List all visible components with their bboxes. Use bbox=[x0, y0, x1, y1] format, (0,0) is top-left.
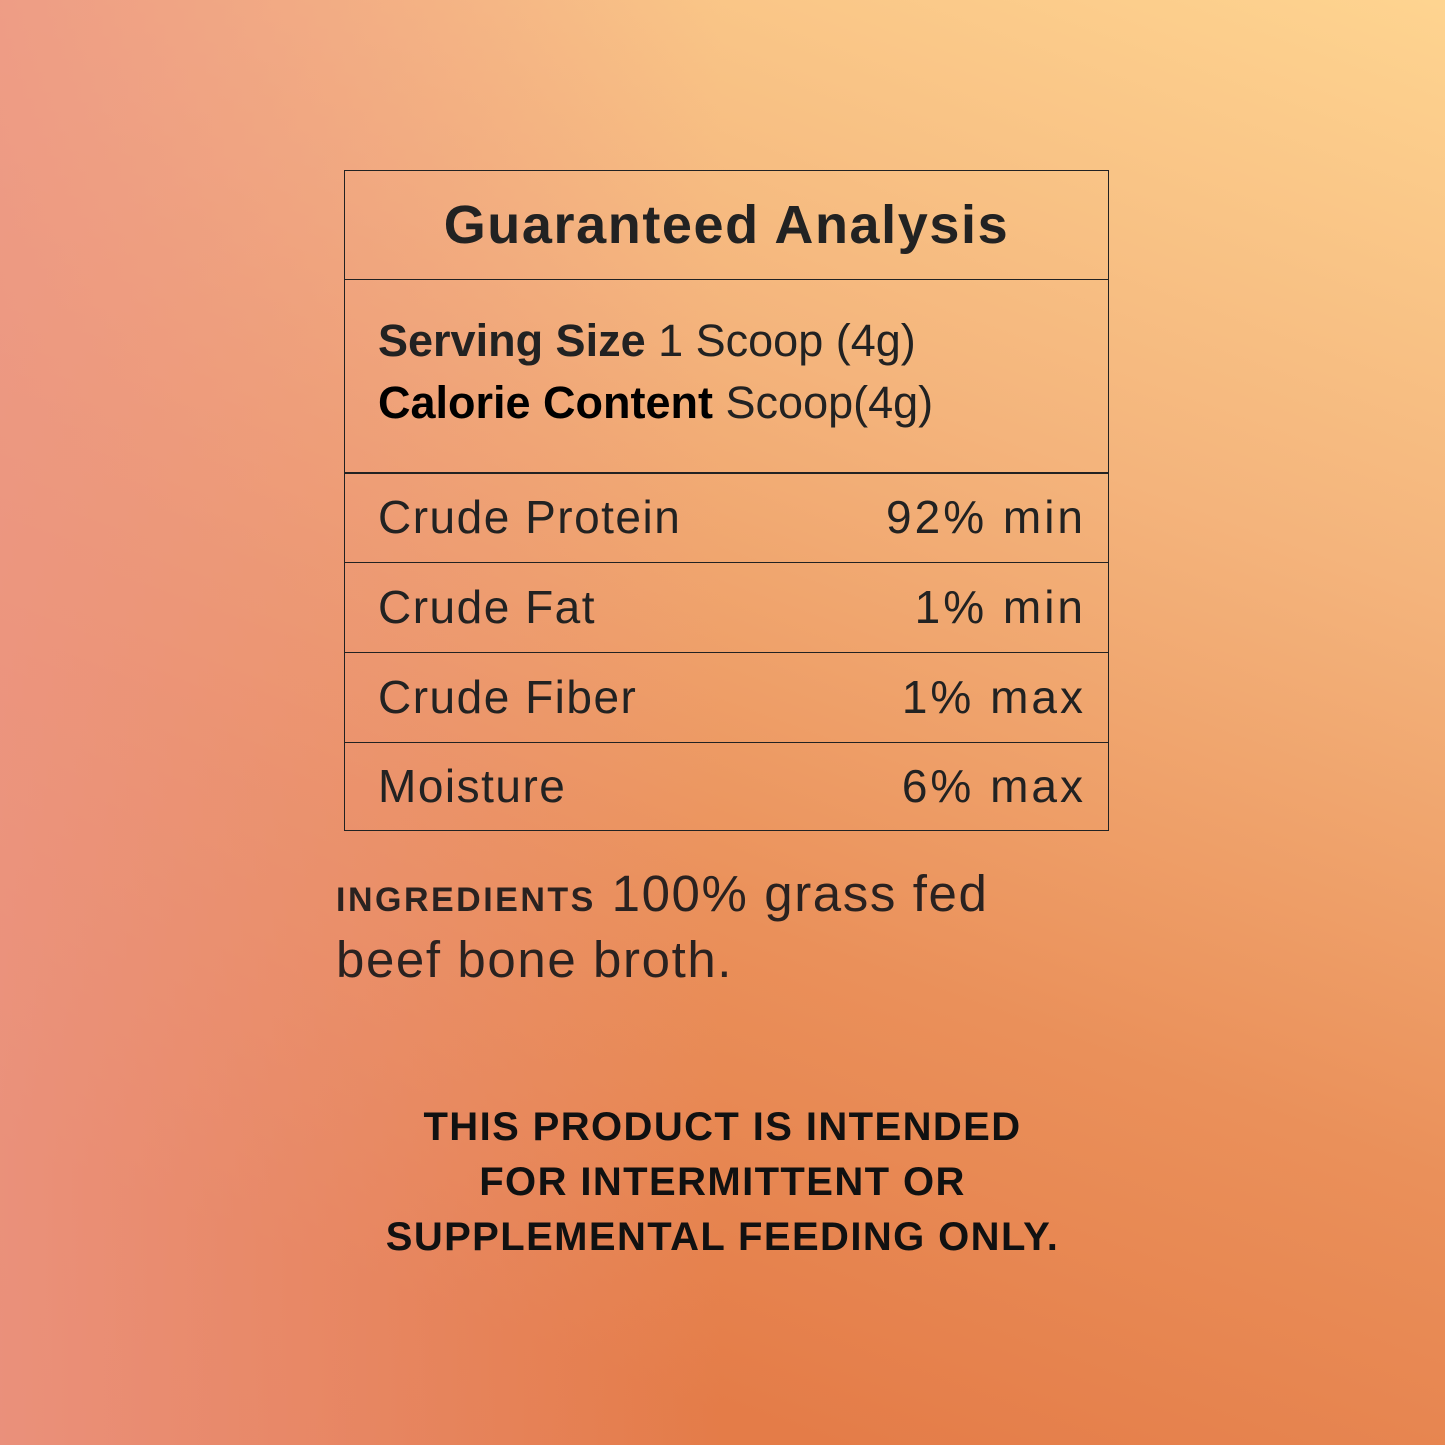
row: moisture: Moisture bbox=[378, 760, 566, 812]
text block: serving info bbox=[345, 279, 1108, 474]
row: moisture bbox=[378, 760, 1086, 812]
panel: guaranteed analysis table bbox=[344, 170, 1109, 831]
text block: serving info: Calorie Content Scoop(4g) bbox=[378, 377, 933, 428]
text block: serving info: Serving Size 1 Scoop (4g) bbox=[378, 315, 916, 366]
row: moisture: 6% max bbox=[902, 760, 1086, 812]
heading: Guaranteed Analysis: Guaranteed Analysis bbox=[444, 195, 1009, 255]
text block: ingredients bbox=[336, 865, 988, 988]
row: crude fat bbox=[345, 563, 1108, 653]
text block: ingredients: INGREDIENTS 100% grass fed bbox=[336, 865, 988, 922]
row: crude fiber: Crude Fiber bbox=[378, 671, 637, 723]
row: crude fat: 1% min bbox=[915, 581, 1086, 633]
text block: disclaimer: SUPPLEMENTAL FEEDING ONLY. bbox=[386, 1215, 1059, 1259]
row: crude protein: Crude Protein bbox=[378, 491, 681, 543]
row: crude protein: 92% min bbox=[886, 491, 1086, 543]
text block: disclaimer: THIS PRODUCT IS INTENDED bbox=[423, 1105, 1022, 1149]
text block: disclaimer bbox=[386, 1105, 1059, 1259]
heading: Guaranteed Analysis bbox=[345, 171, 1108, 280]
text block: disclaimer: FOR INTERMITTENT OR bbox=[479, 1160, 966, 1204]
row: crude fiber: 1% max bbox=[902, 671, 1086, 723]
row: crude fiber bbox=[345, 653, 1108, 743]
row: crude protein bbox=[345, 473, 1108, 563]
text block: ingredients: beef bone broth. bbox=[336, 931, 733, 988]
row: crude fat: Crude Fat bbox=[378, 581, 596, 633]
